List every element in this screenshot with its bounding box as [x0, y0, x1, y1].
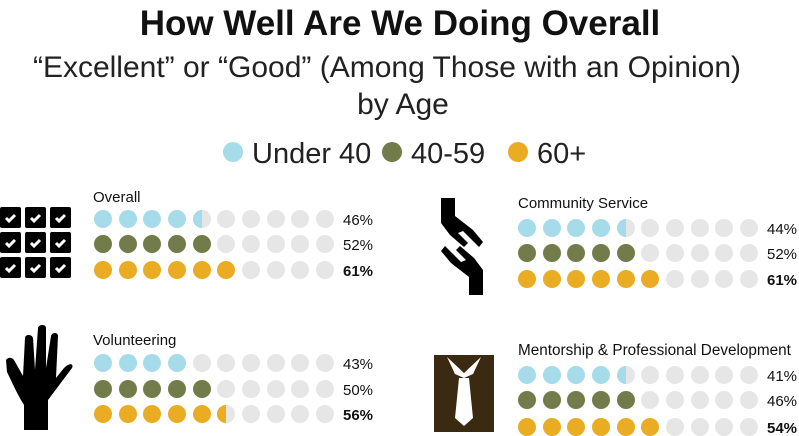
panel: mentorship: 41%	[767, 368, 797, 385]
panel: mentorship: Mentorship & Professional Development	[518, 342, 792, 359]
panel: community service	[518, 195, 797, 289]
icon: helping hands	[441, 198, 483, 295]
icon: shirt and tie	[434, 355, 494, 432]
panel: overall: 61%	[343, 263, 373, 280]
panel: volunteering: 50%	[343, 382, 373, 399]
panel: overall: Overall	[93, 189, 141, 206]
panel: community service: 44%	[767, 221, 797, 238]
panel: mentorship: 46%	[767, 393, 797, 410]
title: How Well Are We Doing Overall	[140, 4, 660, 43]
panel: community service: 52%	[767, 246, 797, 263]
legend: 40-59	[411, 138, 485, 170]
panel: overall	[93, 189, 373, 280]
panel: volunteering	[93, 332, 373, 424]
panel: community service: Community Service	[518, 195, 648, 212]
icon: raised hand	[6, 325, 73, 430]
subtitle	[33, 51, 741, 121]
panel: community service: 61%	[767, 272, 797, 289]
panel: mentorship	[518, 342, 797, 436]
legend	[223, 138, 586, 170]
panel: volunteering: Volunteering	[93, 332, 176, 349]
legend: 60+	[537, 138, 586, 170]
panel: overall: 46%	[343, 212, 373, 229]
panel: volunteering: 43%	[343, 356, 373, 373]
subtitle: “Excellent” or “Good” (Among Those with an Opinion)	[33, 51, 741, 84]
legend: Under 40	[252, 138, 371, 170]
panel: overall: 52%	[343, 237, 373, 254]
subtitle: by Age	[357, 88, 449, 121]
icon: checkbox grid	[0, 207, 71, 278]
panel: volunteering: 56%	[343, 407, 373, 424]
